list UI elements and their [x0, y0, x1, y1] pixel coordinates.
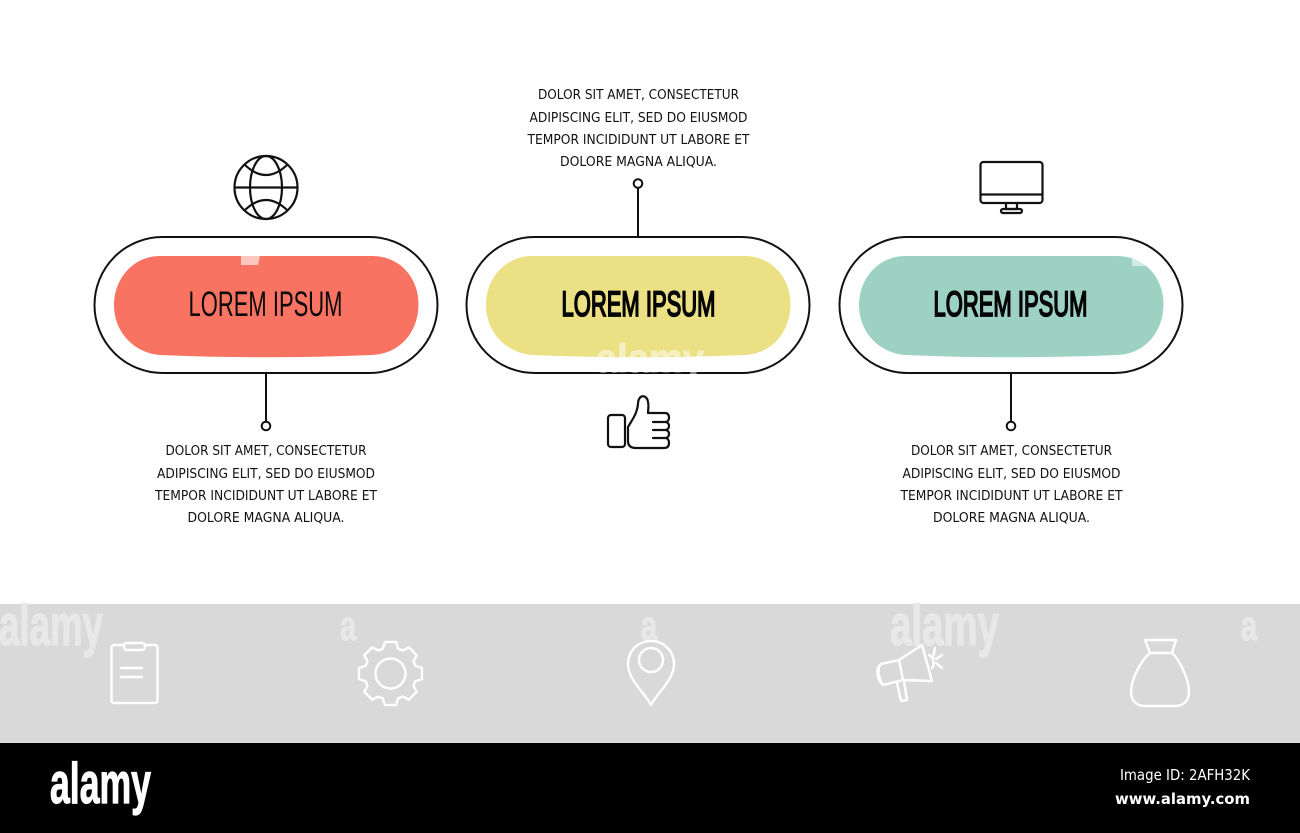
watermark trace on pill three — [1132, 257, 1152, 266]
text block three: DOLOR SIT AMET, CONSECTETUR — [911, 443, 1112, 459]
text block two: ADIPISCING ELIT, SED DO EIUSMOD — [530, 110, 748, 126]
icon: monitor — [980, 162, 1042, 213]
icon: globe — [234, 156, 298, 219]
text block three — [900, 443, 1123, 526]
watermark over pill two: alamy — [596, 337, 705, 381]
watermark small a two: a — [641, 602, 658, 649]
heading one: LOREM IPSUM — [188, 285, 342, 324]
connector three — [1007, 373, 1015, 430]
panel: black footer — [0, 743, 1300, 833]
text block three: DOLORE MAGNA ALIQUA. — [933, 510, 1090, 526]
panel: step two pill — [466, 237, 810, 381]
pill outline one — [94, 237, 438, 373]
pill outline two — [466, 237, 810, 373]
watermark trace on pill one — [241, 256, 260, 265]
image id: Image ID: 2AFH32K — [1120, 766, 1251, 784]
watermark small a three: a — [1241, 602, 1258, 649]
icon: thumbs up — [608, 396, 669, 448]
text block two — [527, 87, 750, 170]
text block two: TEMPOR INCIDIDUNT UT LABORE ET — [527, 132, 750, 148]
website: www.alamy.com — [1115, 790, 1250, 808]
icon: map pin — [628, 641, 674, 705]
text block two: DOLOR SIT AMET, CONSECTETUR — [538, 87, 739, 103]
pill fill one — [114, 256, 418, 357]
watermark left: alamy — [0, 594, 103, 658]
panel: grey icon band — [0, 594, 1300, 743]
footer logo: alamy — [50, 752, 151, 816]
pill outline three — [840, 237, 1182, 373]
pill fill three — [859, 256, 1164, 357]
connector one — [262, 373, 270, 430]
text block three: ADIPISCING ELIT, SED DO EIUSMOD — [902, 466, 1120, 482]
heading two: LOREM IPSUM — [562, 285, 716, 324]
text block two: DOLORE MAGNA ALIQUA. — [560, 154, 717, 170]
watermark centre right: alamy — [890, 594, 999, 658]
footer background — [0, 743, 1300, 833]
heading three: LOREM IPSUM — [934, 285, 1088, 324]
text block one: DOLOR SIT AMET, CONSECTETUR — [166, 443, 366, 459]
connector two — [634, 179, 642, 237]
band background — [0, 604, 1300, 743]
text block one — [154, 443, 378, 526]
text block three: TEMPOR INCIDIDUNT UT LABORE ET — [900, 488, 1123, 504]
pill fill two — [486, 256, 790, 357]
panel: step three pill — [840, 237, 1182, 373]
panel: step one pill — [94, 237, 438, 373]
icon: sack — [1131, 640, 1189, 706]
text block one: TEMPOR INCIDIDUNT UT LABORE ET — [154, 488, 378, 504]
icon: gear — [359, 642, 422, 705]
icon: clipboard — [112, 643, 158, 703]
icon: megaphone — [877, 645, 942, 701]
watermark small a one: a — [340, 602, 357, 649]
text block one: DOLORE MAGNA ALIQUA. — [188, 510, 344, 526]
text block one: ADIPISCING ELIT, SED DO EIUSMOD — [157, 466, 375, 482]
